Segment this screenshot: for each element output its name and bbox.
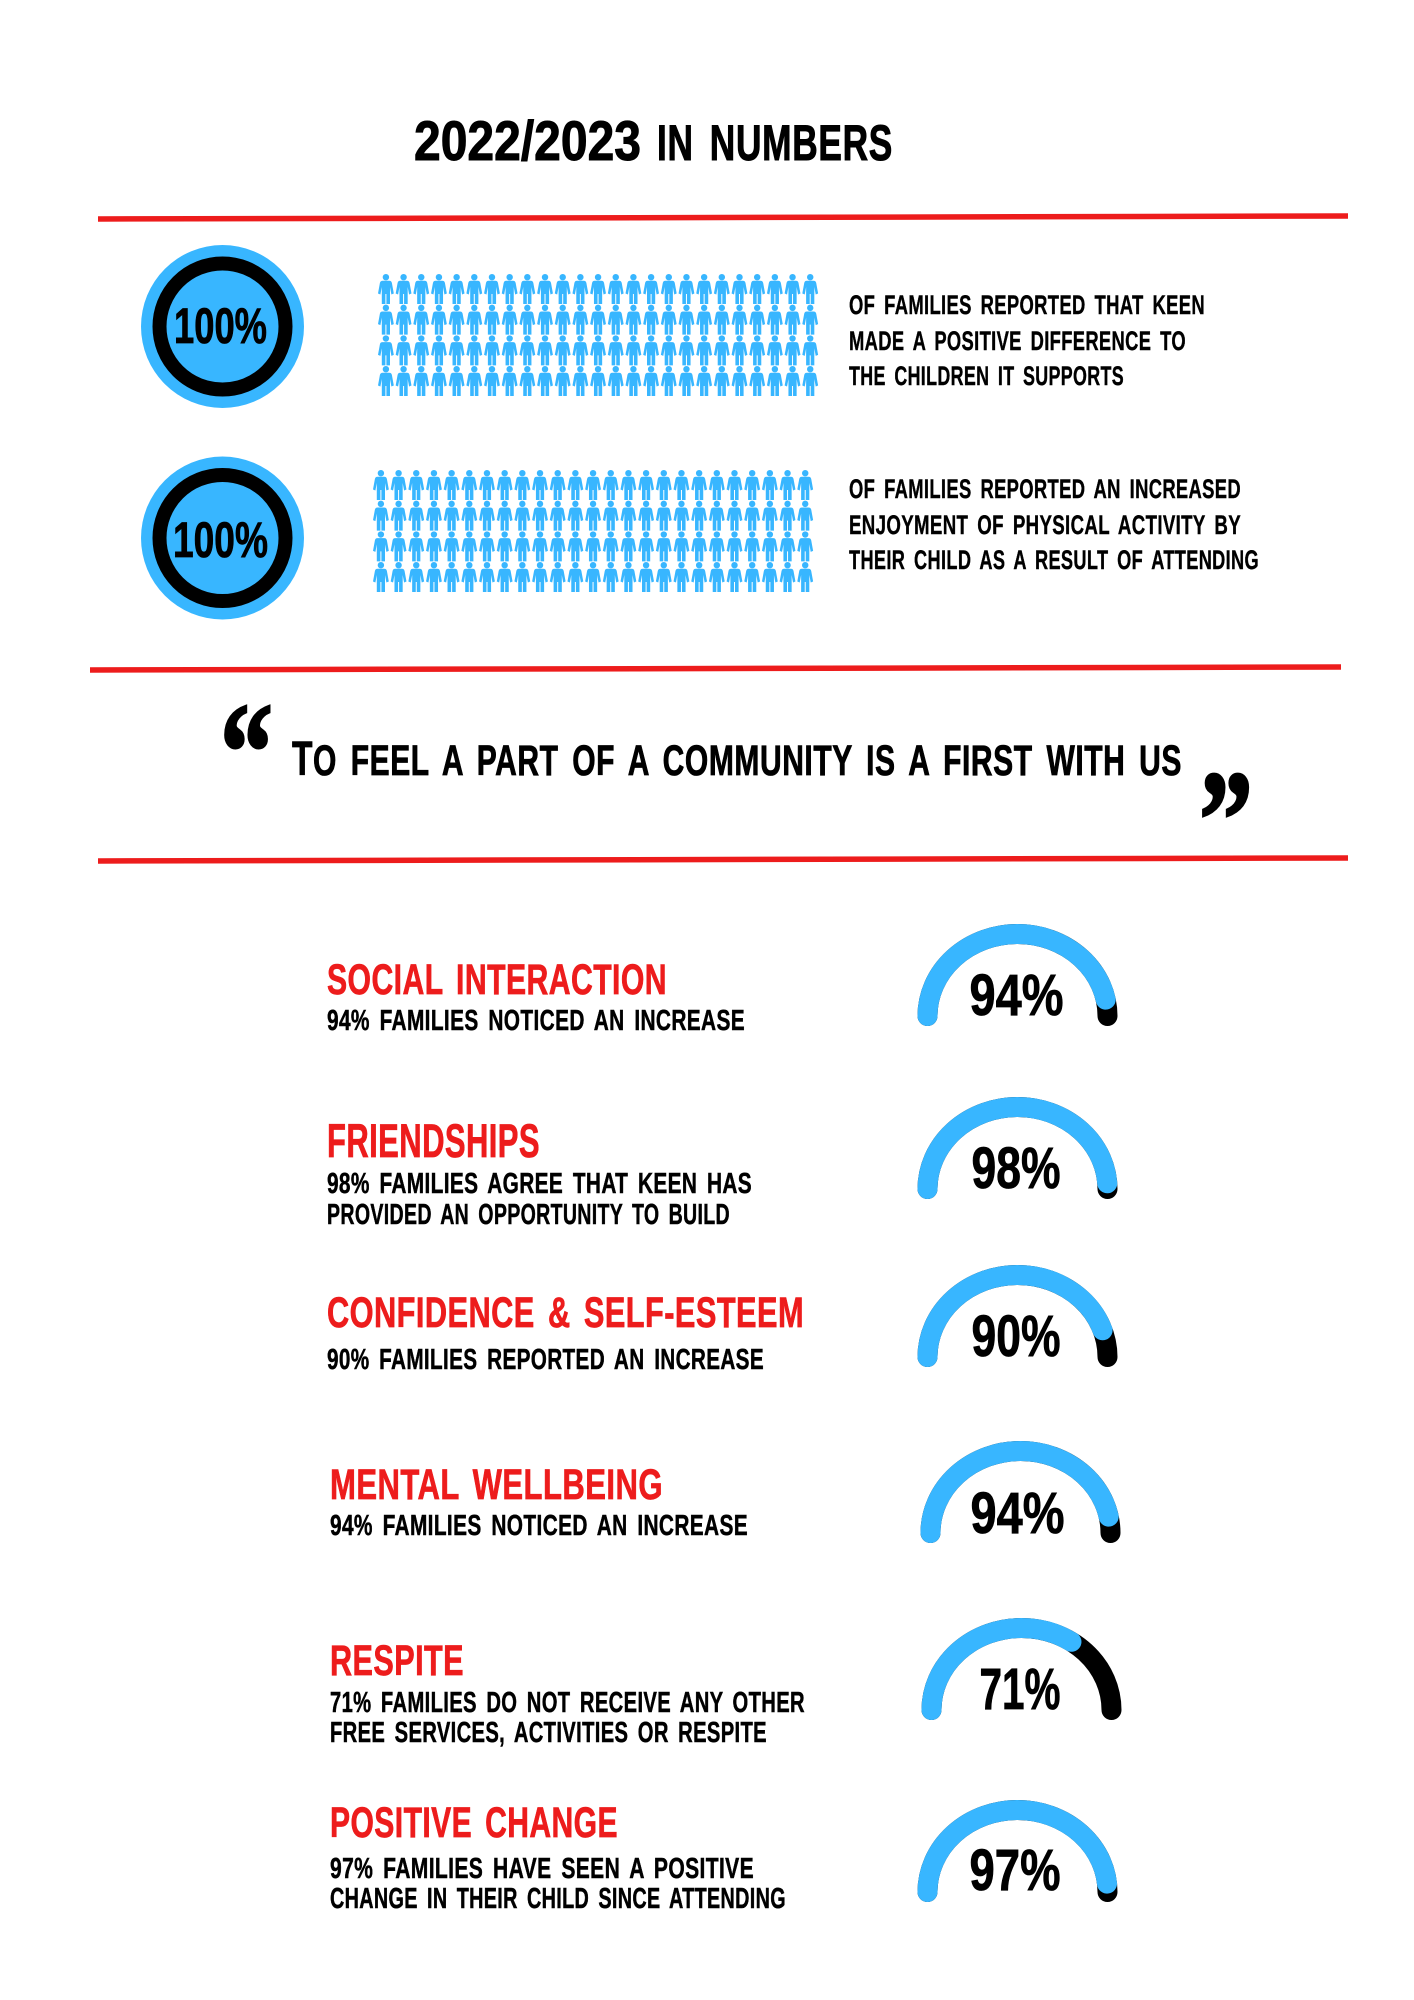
text: respite detail (330, 1687, 805, 1749)
panel: respite (330, 1628, 1112, 1749)
text: positive change detail: CHANGE IN THEIR CHILD SINCE ATTENDING (330, 1883, 786, 1915)
gauge: 94% (928, 934, 1108, 1028)
title: IN NUMBERS (657, 115, 893, 171)
icon grid: 100 people (378, 274, 818, 396)
icon: closing quote mark: ” (1199, 743, 1253, 898)
panel: mental wellbeing (330, 1451, 1110, 1546)
text: social interaction detail: 94% FAMILIES NOTICED AN INCREASE (327, 1005, 745, 1037)
text: positive difference description: OF FAMILIES REPORTED THAT KEEN (849, 290, 1205, 320)
text: physical activity description (849, 474, 1259, 575)
text: friendships detail: 98% FAMILIES AGREE THAT KEEN HAS (327, 1168, 752, 1200)
panel: friendships (327, 1107, 1108, 1231)
heading: confidence and self-esteem: CONFIDENCE & SELF-ESTEEM (327, 1289, 804, 1337)
text: respite detail: 71% FAMILIES DO NOT RECEIVE ANY OTHER (330, 1687, 805, 1719)
badge: 100% positive difference (141, 245, 304, 408)
badge: 100% physical activity (141, 456, 304, 620)
panel: social interaction (327, 934, 1108, 1037)
panel: physical activity stat (141, 456, 1259, 620)
gauge: 98%: 98% (972, 1136, 1060, 1201)
text: friendships detail (327, 1168, 752, 1231)
panel: confidence and self-esteem (327, 1275, 1108, 1376)
icon: opening quote mark: “ (220, 675, 273, 830)
heading: mental wellbeing: MENTAL WELLBEING (330, 1461, 663, 1509)
text: physical activity description: ENJOYMENT OF PHYSICAL ACTIVITY BY (849, 510, 1241, 540)
gauge: 90%: 90% (972, 1304, 1060, 1369)
text: positive change detail: 97% FAMILIES HAVE SEEN A POSITIVE (330, 1853, 754, 1885)
quote (220, 675, 1253, 898)
text: physical activity description: OF FAMILIES REPORTED AN INCREASED (849, 474, 1241, 504)
gauge: 90% (928, 1275, 1108, 1369)
text: mental wellbeing detail: 94% FAMILIES NOTICED AN INCREASE (330, 1510, 748, 1542)
panel: positive change (330, 1799, 1108, 1915)
icon grid: 100 people second (373, 470, 813, 592)
text: positive change detail (330, 1853, 786, 1915)
text: friendships detail: PROVIDED AN OPPORTUNITY TO BUILD (327, 1199, 730, 1231)
gauge: 71% (932, 1628, 1112, 1722)
text: positive difference description: THE CHILDREN IT SUPPORTS (849, 361, 1124, 391)
badge: 100% physical activity: 100% (173, 512, 268, 568)
heading: social interaction: SOCIAL INTERACTION (327, 956, 667, 1004)
text: respite detail: FREE SERVICES, ACTIVITIES OR RESPITE (330, 1717, 767, 1749)
gauge: 94%: 94% (970, 963, 1064, 1028)
heading: positive change: POSITIVE CHANGE (330, 1799, 618, 1847)
gauge: 94% wellbeing (930, 1451, 1110, 1546)
gauge: 98% (928, 1107, 1108, 1201)
heading: respite: RESPITE (330, 1637, 464, 1685)
panel: positive difference stat (141, 245, 1205, 408)
gauge: 97%: 97% (970, 1838, 1060, 1903)
title (414, 109, 893, 172)
text: positive difference description (849, 290, 1205, 391)
gauge: 71%: 71% (980, 1657, 1060, 1722)
gauge: 97% (928, 1810, 1108, 1903)
text: confidence detail: 90% FAMILIES REPORTED AN INCREASE (327, 1344, 764, 1376)
title: 2022/2023 (414, 109, 641, 172)
text: positive difference description: MADE A POSITIVE DIFFERENCE TO (849, 326, 1186, 356)
badge: 100% positive difference: 100% (174, 298, 267, 354)
heading: friendships: FRIENDSHIPS (327, 1114, 540, 1167)
gauge: 94% wellbeing: 94% (970, 1481, 1064, 1546)
